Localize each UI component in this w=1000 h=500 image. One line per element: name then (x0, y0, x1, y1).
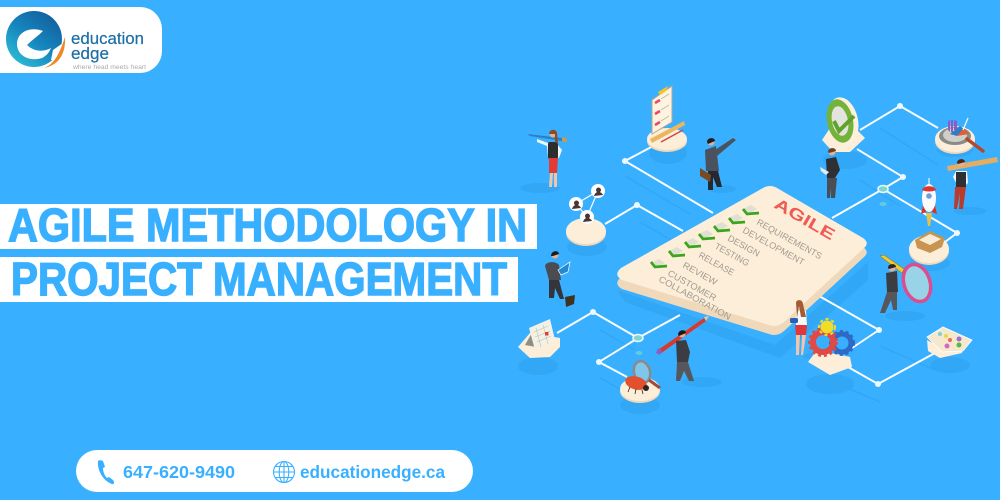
figure: man with tablet (820, 148, 840, 198)
icon: gears (808, 319, 854, 375)
icon: chart under magnifier (935, 118, 983, 154)
icon: rocket launching from box (909, 178, 949, 265)
title (0, 199, 537, 305)
figure: man with briefcase pointing (700, 138, 736, 190)
icon: globe (274, 462, 294, 482)
logo wordmark (71, 30, 146, 71)
logo panel (0, 7, 162, 73)
checklist labels: RELEASE (697, 250, 736, 278)
title: AGILE METHODOLOGY IN (8, 199, 527, 251)
connector nodes (590, 103, 960, 387)
panel: agile checklist card (617, 186, 867, 335)
contact pill (76, 450, 473, 492)
figure: woman holding pencil (527, 130, 567, 187)
icon: clipboard on disc (647, 86, 687, 152)
green check marks (651, 209, 759, 267)
figure: man with spyglass (880, 255, 935, 313)
icon: bug and magnifier (620, 359, 660, 403)
ground shadows (518, 142, 986, 414)
icon: team network on disc (566, 184, 606, 246)
checkboxes (651, 205, 757, 268)
website: educationedge.ca (300, 462, 445, 482)
phone number: 647-620-9490 (123, 462, 235, 482)
icon: green check badge (822, 94, 865, 152)
icon: calendar (518, 319, 560, 358)
figure: man carrying red pencil (656, 316, 709, 381)
checklist labels: TESTING (713, 241, 751, 268)
checklist labels: COLLABORATION (657, 274, 733, 322)
connector lines (557, 106, 957, 384)
figure: man carrying ruler (947, 157, 998, 209)
logo wordmark: education (71, 30, 144, 48)
card heading: AGILE (771, 196, 838, 244)
logo wordmark: edge (71, 45, 109, 63)
shadow lines under connectors (600, 128, 938, 402)
icon: phone (98, 460, 114, 484)
checklist labels: REQUIREMENTS (755, 217, 824, 261)
logo wordmark: where head meets heart (72, 65, 146, 71)
icon: sticky note papers (927, 327, 972, 358)
figure: woman with folder (790, 300, 807, 355)
checklist labels (657, 217, 824, 322)
figure: man with laptop (545, 251, 575, 307)
checklist labels: DEVELOPMENT (741, 225, 807, 267)
title: PROJECT MANAGEMENT (11, 253, 507, 305)
checklist labels: CUSTOMER (666, 268, 719, 303)
logo icon: swirl e (6, 11, 67, 68)
checklist labels: DESIGN (726, 233, 761, 259)
checklist labels: REVIEW (681, 260, 720, 287)
